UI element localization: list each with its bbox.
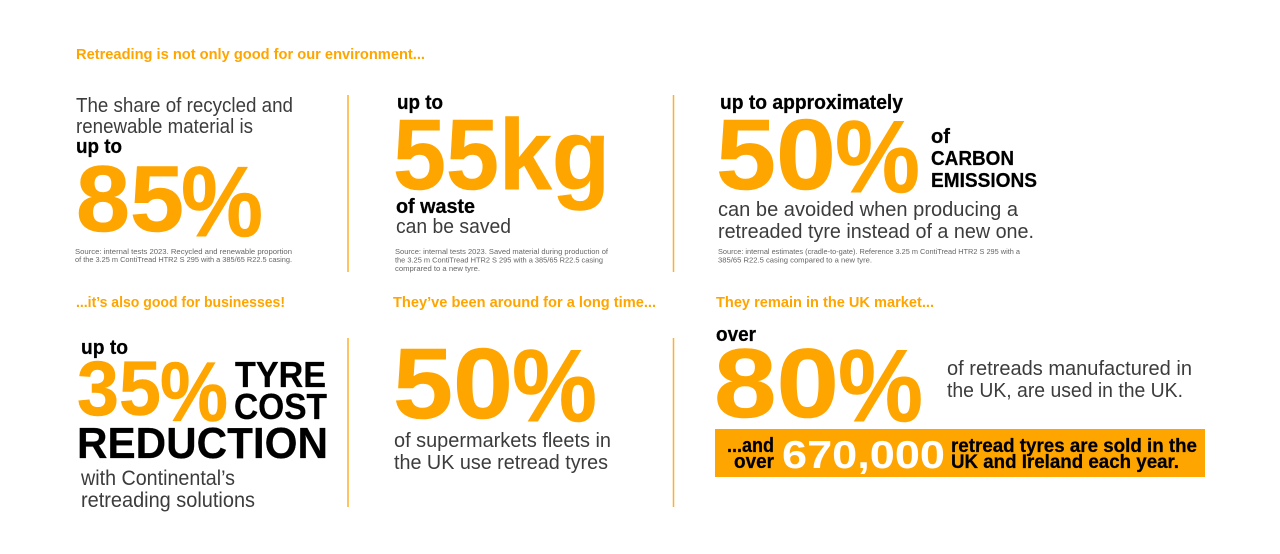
text: reduction: REDUCTION bbox=[77, 419, 328, 468]
text: and over: ...and bbox=[727, 435, 774, 457]
text: with Continental's: retreading solutions bbox=[81, 489, 255, 512]
stat: 50%: 50 bbox=[393, 328, 513, 440]
text: recycled share intro bbox=[76, 95, 293, 138]
text: retreads manufactured bbox=[947, 358, 1192, 402]
text: with Continental's bbox=[80, 467, 255, 512]
stat: 50%: 50 bbox=[716, 99, 836, 211]
text: recycled share intro: renewable material is bbox=[76, 116, 253, 138]
text: and over bbox=[727, 435, 774, 473]
text: supermarket fleets: the UK use retread tyres bbox=[394, 452, 608, 474]
text: up to: up to bbox=[81, 337, 128, 359]
text: sold each year: UK and Ireland each year. bbox=[951, 452, 1179, 473]
text: can be avoided bbox=[718, 199, 1034, 243]
stat: 50%: % bbox=[512, 328, 597, 443]
stat: 55kg: 55kg bbox=[393, 99, 610, 211]
heading: environment: Retreading is not only good for our environment... bbox=[76, 46, 425, 63]
text: up to: up to bbox=[76, 136, 122, 158]
heading: businesses: ...it’s also good for businesses! bbox=[76, 294, 285, 311]
stat: 35%: 35 bbox=[77, 346, 161, 432]
stat: 80%: 80 bbox=[714, 328, 839, 438]
text: retreads manufactured: the UK, are used in the UK. bbox=[947, 380, 1183, 402]
stat: 85% bbox=[76, 146, 263, 258]
stat: 50%: % bbox=[835, 99, 920, 214]
panel: cost reduction bbox=[77, 337, 328, 512]
text: of waste: of waste bbox=[396, 196, 475, 218]
source note: Source: internal estimates (cradle-to-gate). Reference 3.25 m ContiTread HTR2 S 295 with a bbox=[718, 247, 1021, 256]
text: recycled share intro: The share of recycled and bbox=[76, 95, 293, 117]
panel: waste saved bbox=[393, 92, 610, 273]
source note: 385/65 R22.5 casing compared to a new tyre. bbox=[718, 256, 872, 264]
stat: 50% bbox=[716, 99, 920, 214]
text: supermarket fleets bbox=[394, 430, 611, 474]
text: of carbon emissions: CARBON bbox=[931, 148, 1014, 170]
stat: 85%: % bbox=[181, 146, 263, 258]
text: up to approximately: up to approximately bbox=[720, 92, 904, 114]
text: sold each year bbox=[951, 436, 1197, 473]
source note: the 3.25 m ContiTread HTR2 S 295 with a 385/65 R22.5 casing bbox=[395, 256, 603, 264]
text: up to: up to bbox=[397, 92, 443, 114]
stat: 50% bbox=[393, 328, 597, 443]
heading: UK market: They remain in the UK market... bbox=[716, 294, 934, 311]
panel: UK market bbox=[714, 324, 1205, 477]
text: of carbon emissions bbox=[931, 126, 1037, 192]
text: retreads manufactured: of retreads manufactured in bbox=[947, 358, 1192, 380]
text: can be avoided: retreaded tyre instead of a new one. bbox=[718, 221, 1034, 243]
stat: 80%: % bbox=[838, 328, 923, 443]
text: over: over bbox=[716, 324, 756, 346]
source note bbox=[718, 247, 1021, 264]
stat: 35% bbox=[77, 345, 228, 439]
stat: 80% bbox=[714, 328, 923, 443]
stat: 35%: % bbox=[160, 345, 228, 439]
text: sold each year: retread tyres are sold in the bbox=[951, 436, 1197, 457]
text: can be avoided: can be avoided when producing a bbox=[718, 199, 1019, 221]
panel: recycled material bbox=[75, 95, 293, 264]
source note: comprared to a new tyre. bbox=[395, 264, 480, 273]
panel: carbon emissions bbox=[716, 92, 1037, 264]
text: tyre cost bbox=[234, 354, 327, 427]
stat: 85%: 85 bbox=[76, 146, 184, 251]
source note bbox=[75, 247, 292, 264]
text: supermarket fleets: of supermarkets fleets in bbox=[394, 430, 611, 452]
source note: Source: internal tests 2023. Saved material during production of bbox=[395, 247, 609, 256]
text: tyre cost: TYRE bbox=[235, 354, 326, 395]
panel: supermarkets bbox=[393, 328, 611, 474]
text: can be saved: can be saved bbox=[396, 216, 511, 238]
text: and over: over bbox=[734, 451, 774, 473]
source note bbox=[395, 247, 609, 273]
banner: 670,000 tyres bbox=[715, 429, 1205, 477]
heading: long time: They’ve been around for a long time... bbox=[393, 294, 656, 311]
source note: of the 3.25 m ContiTread HTR2 S 295 with a 385/65 R22.5 casing. bbox=[75, 255, 292, 264]
source note: Source: internal tests 2023. Recycled and renewable proportion bbox=[75, 247, 292, 256]
text: of carbon emissions: of bbox=[931, 126, 950, 148]
stat: 670,000: 670,000 bbox=[782, 434, 945, 477]
text: with Continental's: with Continental’s bbox=[80, 467, 235, 490]
text: of carbon emissions: EMISSIONS bbox=[931, 170, 1037, 192]
text: tyre cost: COST bbox=[234, 386, 327, 427]
